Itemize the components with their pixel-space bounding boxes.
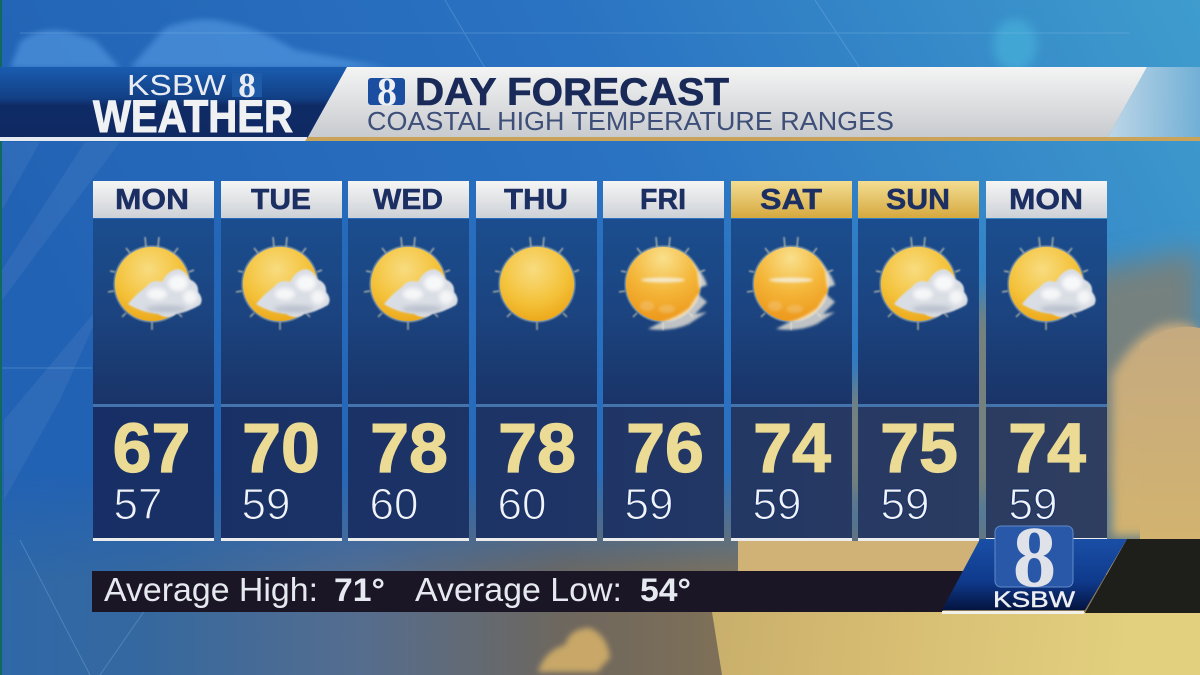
column: Tuesday: TUE [251, 184, 311, 216]
column: Sunday: 75 [880, 409, 958, 487]
banner: KSBW Weather [0, 66, 347, 142]
column: next Monday: 74 [1008, 409, 1086, 487]
column: next Monday [986, 181, 1107, 541]
column: Wednesday: 60 [370, 480, 418, 529]
column: Friday: 59 [625, 480, 673, 529]
column: Tuesday: 70 [242, 409, 320, 487]
column: Sunday: SUN [886, 184, 950, 216]
title panel [305, 67, 1200, 141]
column: Thursday: 78 [498, 409, 576, 487]
column: Tuesday: 59 [242, 480, 290, 529]
heading: DAY FORECAST [415, 71, 729, 114]
channel 8 badge [368, 69, 405, 114]
column: Wednesday: WED [373, 184, 443, 216]
KSBW 8 logo [942, 508, 1127, 614]
averages bar: 54° [640, 572, 691, 608]
channel 8 badge: 8 [377, 69, 397, 114]
column: Friday: 76 [626, 409, 704, 487]
column: Thursday [476, 181, 597, 541]
column: Monday: 67 [113, 409, 190, 487]
averages bar: Average High: [104, 571, 318, 608]
decorative streaks [2, 142, 120, 500]
icon: hazy sun [619, 237, 707, 330]
KSBW wordmark: KSBW [127, 70, 227, 102]
column: Sunday: 59 [881, 480, 929, 529]
dark right strip [1085, 539, 1200, 613]
icon: hazy sun [747, 237, 835, 330]
subheading: COASTAL HIGH TEMPERATURE RANGES [367, 106, 894, 136]
column: Thursday: THU [504, 184, 568, 216]
column: next Monday: MON [1009, 184, 1083, 216]
column: Sunday [858, 181, 979, 541]
icon: partly cloudy [108, 237, 202, 330]
column: Monday [93, 181, 214, 541]
channel 8 badge small: 8 [238, 66, 256, 105]
KSBW 8 logo: KSBW [993, 587, 1075, 612]
icon: partly cloudy [1002, 237, 1096, 330]
column: Saturday: 74 [753, 409, 831, 487]
icon: partly cloudy [874, 237, 968, 330]
averages bar: Average Low: [415, 571, 622, 608]
decorative clouds top [10, 20, 390, 68]
channel 8 badge small [232, 66, 262, 105]
column: Saturday [731, 181, 852, 541]
column: Tuesday [221, 181, 342, 541]
column: next Monday: 59 [1009, 480, 1057, 529]
column: Monday: 57 [114, 480, 162, 529]
column: Friday [603, 181, 724, 541]
column: Friday: FRI [640, 184, 686, 216]
column: Wednesday: 78 [370, 409, 448, 487]
icon: sunny [493, 237, 579, 330]
icon: partly cloudy [236, 237, 330, 330]
column: Monday: MON [115, 184, 189, 216]
icon: partly cloudy [364, 237, 458, 330]
column: Saturday: SAT [760, 184, 822, 216]
WEATHER wordmark: WEATHER [93, 91, 293, 142]
KSBW 8 logo: 8 [1013, 508, 1056, 605]
column: Wednesday [348, 181, 469, 541]
column: Saturday: 59 [753, 480, 801, 529]
averages bar: 71° [334, 572, 385, 608]
averages bar [92, 571, 965, 612]
column: Thursday: 60 [498, 480, 546, 529]
